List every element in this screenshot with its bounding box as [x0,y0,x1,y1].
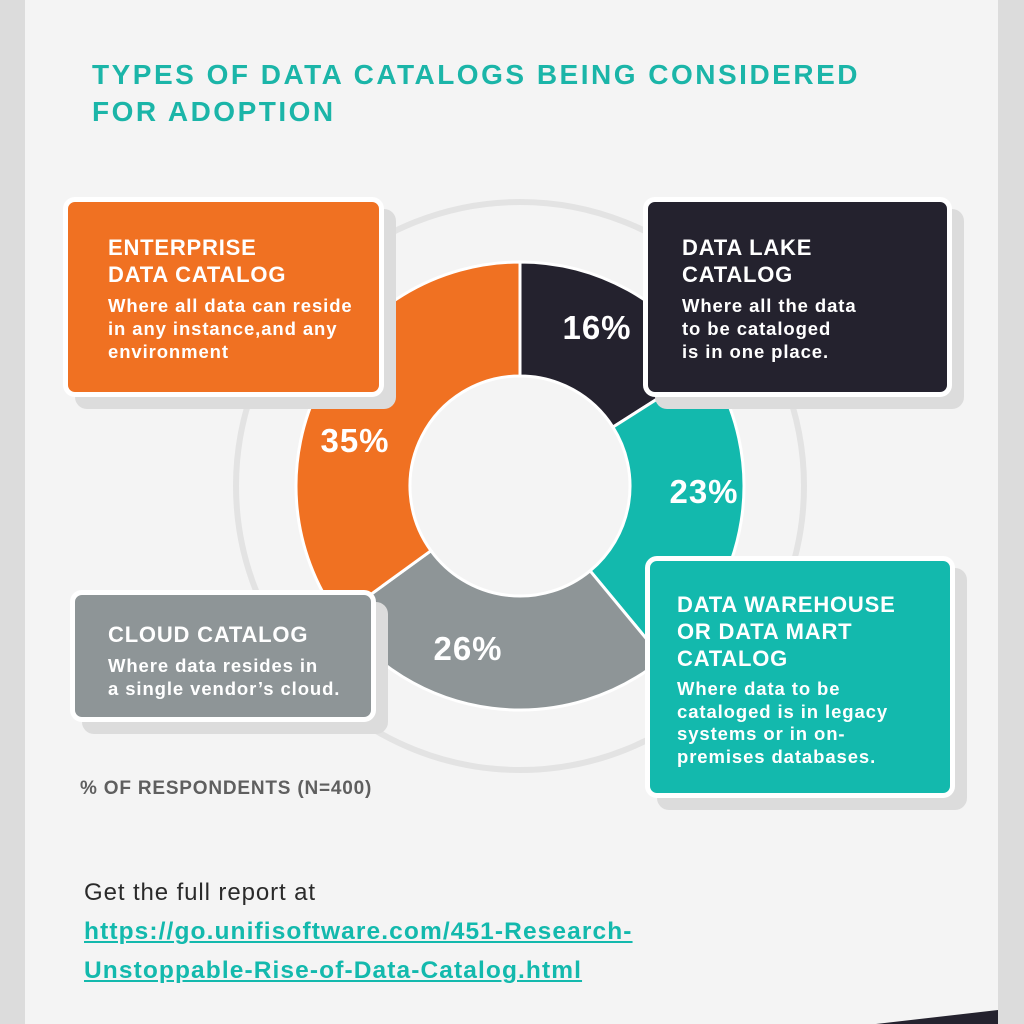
donut chart: 26% [433,630,503,667]
segment: warehouse 23% [590,366,744,659]
card: warehouse: DATA WAREHOUSE [677,592,896,617]
card: enterprise: DATA CATALOG [108,262,286,287]
segment: cloud 26% [339,551,663,710]
title: FOR ADOPTION [92,96,336,127]
card: data lake: DATA LAKE [682,235,812,260]
card: cloud [70,590,376,722]
card: cloud: Where data resides in [108,655,318,676]
card: data lake: to be cataloged [682,318,831,339]
footer: https://go.unifisoftware.com/451-Research- [84,918,633,945]
card: enterprise: in any instance,and any [108,318,337,339]
card: data lake: is in one place. [682,341,829,362]
card: cloud: CLOUD CATALOG [108,622,308,647]
donut chart: 23% [669,473,739,510]
title: TYPES OF DATA CATALOGS BEING CONSIDERED [92,59,860,90]
footer [84,879,633,984]
donut chart: 16% [562,309,632,346]
card: warehouse: CATALOG [677,646,788,671]
card: cloud: a single vendor’s cloud. [108,678,340,699]
card: warehouse: OR DATA MART [677,619,852,644]
card: warehouse: Where data to be [677,678,840,699]
segment: enterprise 35% [296,262,520,618]
card: data lake [643,197,952,397]
donut chart: 35% [320,422,390,459]
title [92,59,860,127]
card: data lake: CATALOG [682,262,793,287]
footer: Unstoppable-Rise-of-Data-Catalog.html [84,957,582,984]
segment: data lake 16% [520,262,709,427]
footer: Get the full report at [84,879,316,906]
card: warehouse: cataloged is in legacy [677,700,888,722]
card: enterprise: Where all data can reside [108,295,353,316]
card: enterprise: environment [108,341,229,362]
respondents note: % OF RESPONDENTS (N=400) [80,778,372,799]
card: warehouse: systems or in on- [677,723,845,744]
card: enterprise [63,197,384,397]
card: warehouse: premises databases. [677,746,876,766]
card: data lake: Where all the data [682,295,857,316]
card: enterprise: ENTERPRISE [108,235,257,260]
card: warehouse [645,556,955,798]
